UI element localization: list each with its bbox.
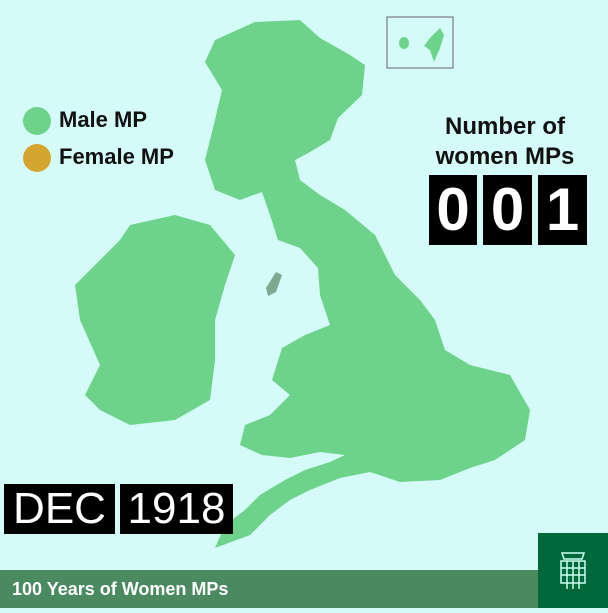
counter digits: 1: [546, 176, 579, 243]
counter heading: Number of: [445, 113, 565, 140]
legend: female: Female MP: [59, 144, 174, 169]
Great Britain: [205, 20, 530, 548]
counter digits: 0: [491, 176, 524, 243]
legend: male: Male MP: [59, 107, 147, 132]
counter digits: [429, 175, 587, 245]
Isle of Man: [266, 272, 282, 296]
counter digits: 0: [436, 176, 470, 243]
footer bar: [0, 570, 608, 608]
legend: male: [23, 107, 147, 135]
footer bar: 100 Years of Women MPs: [12, 579, 228, 599]
date: 1918: [128, 484, 225, 533]
date: [4, 484, 233, 534]
Shetland inset: [387, 17, 453, 68]
date: DEC: [13, 484, 106, 533]
counter heading: [436, 113, 574, 170]
legend: female: [23, 144, 174, 172]
logo: portcullis: [538, 533, 608, 608]
Ireland: [75, 215, 235, 425]
legend: [23, 107, 174, 172]
counter heading: women MPs: [436, 143, 574, 170]
